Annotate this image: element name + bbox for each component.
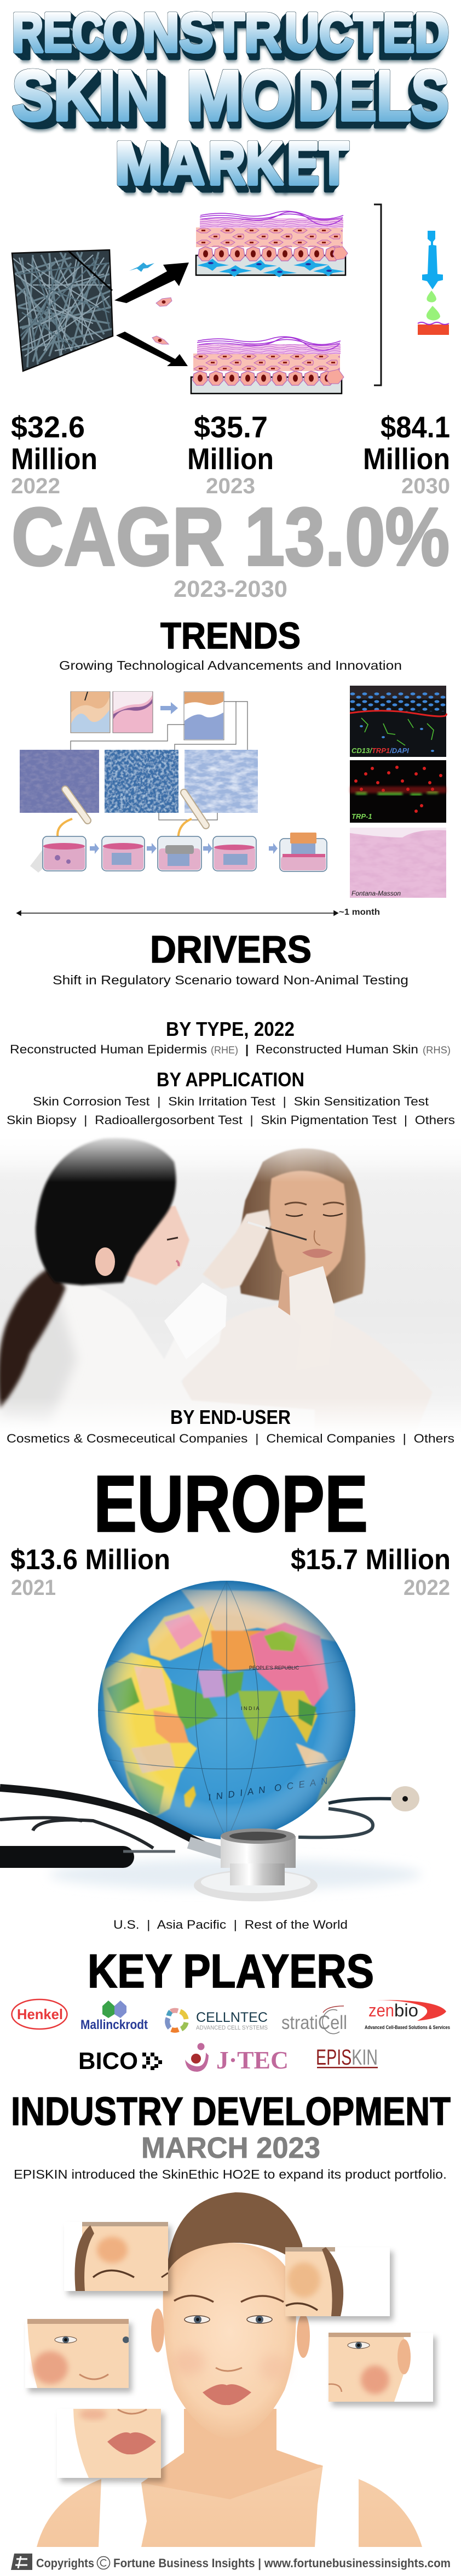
timeline arrow	[17, 911, 338, 915]
continent: Africa	[101, 1652, 197, 1820]
globe	[98, 1581, 361, 1839]
market value 2022: Million	[11, 442, 97, 476]
market value 2030: $84.1	[381, 410, 450, 444]
separated skin layers box	[184, 692, 224, 740]
Europe value 2021: 2021	[11, 1576, 56, 1600]
melanocyte culture image	[20, 750, 99, 813]
micrograph: TRP-1	[350, 760, 446, 823]
culture dish five with grafted skin	[280, 833, 327, 871]
market value 2022	[11, 410, 97, 498]
copyright text: Copyrights	[36, 2556, 94, 2570]
drivers subtitle: Shift in Regulatory Scenario toward Non-Animal Testing	[53, 973, 408, 987]
logo: Henkel: Henkel	[17, 2006, 63, 2022]
panel: lips	[57, 2409, 161, 2478]
continent: Pakistan	[222, 1672, 244, 1698]
continent: Mongolia	[264, 1631, 297, 1651]
doctor face	[115, 1206, 189, 1285]
key players heading: KEY PLAYERS	[88, 1945, 374, 1998]
micrograph: Fontana-Masson: Fontana-Masson	[351, 890, 401, 897]
continent: Russia	[181, 1588, 336, 1642]
shoulders	[37, 2461, 422, 2547]
panel: cheek right	[329, 2333, 433, 2402]
patient neck	[278, 1272, 323, 1317]
panel: forehead left	[64, 2222, 168, 2291]
continent: Arabia	[171, 1683, 218, 1729]
globe meridians	[98, 1581, 355, 1839]
continent: Madagascar	[184, 1786, 196, 1808]
market value 2023: Million	[187, 442, 274, 476]
panel: forehead right	[285, 2247, 390, 2316]
stethoscope	[0, 1786, 419, 1901]
CAGR period: 2023-2030	[174, 576, 287, 602]
title: RK	[208, 130, 283, 197]
tank straps	[99, 2479, 147, 2547]
logo: zenbio: zen	[368, 2001, 394, 2020]
skin section box one	[71, 692, 110, 733]
segment: by end-user: Cosmetics & Cosmeceutical Companies | Chemical Companies | Others	[7, 1432, 454, 1445]
nose	[216, 2368, 242, 2371]
Europe value 2022: $15.7 Million	[291, 1544, 451, 1576]
region heading: Europe: EUROPE	[94, 1459, 368, 1548]
micrograph: CD13 TRP1 DAPI	[350, 686, 446, 757]
logo: zenbio	[365, 2000, 450, 2030]
title: RECO	[12, 2, 137, 64]
doctor gloved hand	[203, 1210, 271, 1289]
segment: by type: |	[245, 1042, 249, 1056]
trends subtitle: Growing Technological Advancements and Innovation	[59, 658, 402, 673]
eyes	[185, 2316, 272, 2323]
micrograph: CD13 TRP1 DAPI: CD13/TRP1/DAPI	[351, 746, 409, 755]
patient face	[270, 1171, 347, 1285]
ground shadow	[49, 1859, 422, 1890]
segment: by type	[10, 1018, 451, 1056]
logo: J-TEC: J·TEC	[216, 2046, 289, 2074]
arrow: to top model	[114, 263, 189, 303]
title: MA	[115, 130, 205, 197]
title	[12, 2, 449, 197]
culture dish three	[158, 836, 201, 871]
continent: South East Asia	[280, 1691, 318, 1743]
market value 2023	[187, 410, 274, 498]
keratinocyte culture image	[105, 750, 178, 813]
globe: I N D I A	[241, 1706, 260, 1711]
patient t-shirt	[176, 1300, 433, 1432]
logo: BICO: BICO	[78, 2048, 138, 2075]
continent: Iran	[197, 1669, 226, 1698]
continent: Central Asia	[211, 1631, 268, 1672]
segment: by application: BY APPLICATION	[157, 1068, 304, 1091]
process arrows	[90, 843, 278, 854]
other regions: U.S. | Asia Pacific | Rest of the World	[113, 1918, 348, 1931]
doctor ponytail	[0, 1266, 66, 1409]
culture dish one	[30, 836, 86, 873]
market value 2023: 2023	[206, 474, 255, 498]
neck	[141, 2409, 323, 2499]
segment: by application: Skin Corrosion Test | Skin Irritation Test | Skin Sensitization Test	[33, 1095, 429, 1108]
test tube two	[178, 793, 206, 843]
top fade	[0, 1133, 461, 1182]
photo: doctor injecting patient	[0, 1133, 461, 1433]
segment: by application: Skin Biopsy | Radioallergosorbent Test | Skin Pigmentation Test | Others	[7, 1113, 455, 1127]
photo: globe and stethoscope	[0, 1581, 422, 1901]
doctor hair	[36, 1138, 176, 1285]
drivers heading: DRIVERS	[150, 928, 312, 971]
title: NSTR	[142, 2, 281, 64]
lips	[203, 2384, 251, 2405]
continent: India	[238, 1691, 279, 1740]
icon: copyright mark	[97, 2556, 110, 2569]
logo: J-TEC	[185, 2043, 289, 2074]
micrograph: TRP-1: TRP-1	[351, 812, 372, 820]
segment: by type: Reconstructed Human Epidermis	[10, 1042, 207, 1056]
segment: by type: Reconstructed Human Skin	[256, 1042, 418, 1056]
logo: Henkel	[12, 1999, 67, 2029]
logo: stratiCell	[281, 2006, 347, 2034]
connector lines	[71, 702, 247, 820]
icon: fibre scaffold	[12, 250, 113, 371]
globe edge shading	[98, 1581, 355, 1839]
micrograph: Fontana-Masson	[350, 828, 446, 898]
logo: Cellntec	[168, 2010, 268, 2031]
arrow: to bottom model	[116, 332, 188, 366]
culture dish two	[102, 836, 145, 871]
Europe value 2021	[10, 1544, 170, 1600]
market value 2022: 2022	[11, 474, 60, 498]
market value 2030: Million	[363, 442, 450, 476]
title: MO	[186, 55, 293, 135]
market value 2022: $32.6	[11, 410, 85, 444]
fibroblast culture image	[185, 750, 258, 813]
icon: floating fibroblast	[129, 263, 154, 272]
segment: by type: BY TYPE, 2022	[166, 1018, 295, 1040]
globe: PEOPLE'S REPUBLIC	[249, 1665, 299, 1671]
Europe value 2022: 2022	[404, 1576, 450, 1600]
footer	[11, 2554, 451, 2570]
development date: MARCH 2023	[141, 2132, 320, 2164]
logo: Cellntec: ADVANCED CELL SYSTEMS	[196, 2025, 268, 2031]
skin section box two	[113, 692, 153, 733]
doctor ear	[95, 1247, 115, 1276]
hero illustration: skin model construction	[12, 204, 449, 394]
icon: Fortune Business Insights logo	[11, 2554, 32, 2570]
market value 2030	[363, 410, 450, 498]
logo: zenbio: bio	[394, 2001, 418, 2020]
logos	[12, 1999, 450, 2075]
top skin model	[196, 211, 348, 277]
logo: Cellntec: CELLNTEC	[196, 2010, 268, 2025]
segment: by end-user	[7, 1406, 454, 1445]
syringe	[247, 1222, 307, 1240]
icon: floating keratinocyte two	[152, 336, 169, 344]
logo: Mallinckrodt: Mallinckrodt	[80, 2018, 148, 2032]
doctor coat	[0, 1277, 315, 1432]
bottom fade	[0, 1398, 461, 1433]
ears	[151, 2309, 310, 2358]
continent: Europe	[148, 1606, 219, 1661]
segment: by type: (RHE)	[211, 1045, 238, 1056]
title: SKIN	[12, 55, 160, 135]
Europe value 2021: $13.6 Million	[10, 1544, 170, 1576]
culture dish four	[213, 836, 256, 871]
Europe value 2022	[291, 1544, 451, 1600]
patient hair	[239, 1148, 365, 1303]
icon: floating keratinocyte one	[156, 298, 172, 306]
face	[163, 2243, 296, 2440]
chin-holding gloved hand	[289, 1266, 335, 1370]
timeline label: ~1 month	[339, 908, 380, 917]
trends diagram: tissue engineering process	[17, 686, 446, 917]
continent: Australia	[315, 1756, 347, 1804]
market value 2030: 2030	[401, 474, 450, 498]
logo: stratiCell: stratiCell	[281, 2012, 347, 2033]
development description: EPISKIN introduced the SkinEthic HO2E to expand its product portfolio.	[14, 2167, 447, 2181]
eyebrows	[174, 2295, 284, 2302]
photo: woman's face with skin detail panels	[25, 2192, 433, 2547]
segment: by end-user: BY END-USER	[170, 1406, 291, 1428]
test tube one	[57, 789, 88, 839]
segment: by type: (RHS)	[423, 1045, 451, 1056]
title: ET	[287, 130, 349, 197]
segment: by application	[7, 1068, 455, 1127]
logo: Mallinckrodt	[80, 2001, 148, 2032]
trends heading: TRENDS	[160, 615, 301, 657]
globe labels: I N D I A N O C E A N	[208, 1776, 329, 1803]
icon: dropper over skin	[418, 231, 449, 335]
logo: EPISKIN: EPISKIN	[316, 2045, 378, 2070]
bottom skin model	[191, 337, 344, 394]
panel: cheek left	[25, 2319, 129, 2388]
market value 2023: $35.7	[194, 410, 268, 444]
continent: China	[250, 1622, 329, 1716]
bracket	[374, 204, 381, 385]
hair	[164, 2192, 306, 2296]
arrow: skin to layers	[160, 702, 178, 714]
